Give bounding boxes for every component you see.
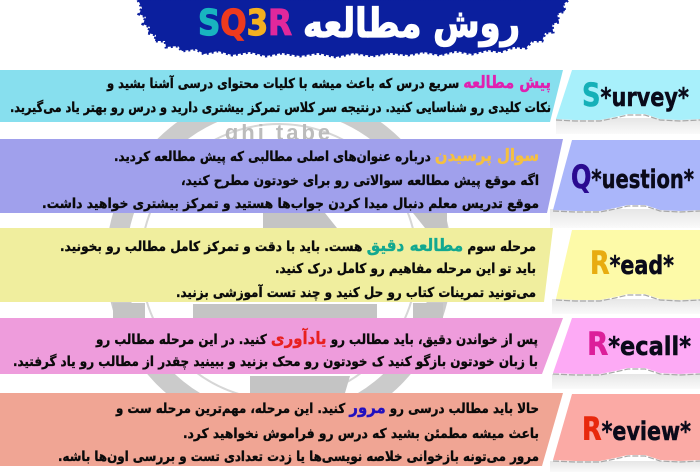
- text: review description: [58, 398, 539, 465]
- text: review description: باعث میشه مطمئن بشید که درس رو فراموش نخواهید کرد.: [183, 426, 539, 442]
- text: read description: [60, 236, 536, 301]
- title text: SQ3R: SQ3R: [198, 3, 292, 44]
- text: read description: مرحله سوم مطالعه دقیق هست. باید با دقت و تمرکز کامل مطالب رو بخونید.: [60, 236, 536, 256]
- panel: question: [0, 139, 700, 228]
- band: read: [0, 228, 553, 302]
- panel: review: [0, 393, 700, 472]
- text: recall description: با زبان خودتون بازگو کنید ک خودتون رو محک بزنید و ببینید چقدر از مطالب رو یاد گرفتید.: [13, 353, 538, 370]
- panel: read: [0, 228, 700, 314]
- text: recall description: پس از خواندن دقیق، باید مطالب رو یادآوری کنید. در این مرحله مطالب رو: [95, 327, 538, 349]
- card: review paper: [550, 394, 700, 472]
- watermark: circular stamp: ghi tabe: [225, 120, 333, 145]
- band: question: [0, 139, 563, 213]
- text: read description: می‌تونید تمرینات کتاب رو حل کنید و چند تست آموزشی بزنید.: [176, 284, 536, 301]
- card: read paper: R*ead*: [590, 244, 674, 282]
- text: question description: اگه موقع پیش مطالعه سوالاتی رو برای خودتون مطرح کنید،: [181, 172, 539, 189]
- text: survey description: نکات کلیدی رو شناسایی کنید. درنتیجه سر کلاس تمرکز بیشتری دارید و درس رو بهتر یاد می‌گیرید.: [10, 99, 551, 116]
- panel: survey: [0, 70, 700, 134]
- title banner: [138, 0, 568, 57]
- text: read description: باید تو این مرحله مفاهیم رو کامل درک کنید.: [275, 261, 536, 277]
- card: recall paper: [552, 318, 700, 389]
- banner: torn blue brush shape: [138, 0, 568, 57]
- text: review description: مرور می‌تونه بازخوانی خلاصه نویسی‌ها یا زدت تعدادی تست و بررسی اون‌ها باشه.: [58, 449, 539, 465]
- band: review: [0, 393, 563, 466]
- band: recall: [0, 318, 563, 374]
- band: survey: [0, 70, 563, 122]
- text: question description: سوال پرسیدن درباره عنوان‌های اصلی مطالبی که پیش مطالعه کردید.: [114, 146, 539, 166]
- card: question paper: [550, 140, 700, 228]
- text: survey description: [10, 73, 551, 116]
- panel: recall: [0, 318, 700, 389]
- card: read paper: [552, 230, 700, 314]
- text: recall description: [13, 327, 538, 370]
- watermark: circular stamp: [113, 99, 447, 425]
- text: survey description: پیش مطالعه سریع درس که باعث میشه با کلیات محتوای درسی آشنا بشید و: [106, 73, 551, 93]
- text: review description: حالا باید مطالب درسی رو مرور کنید. این مرحله، مهم‌ترین مرحله ست و: [115, 398, 539, 418]
- card: survey paper: [556, 70, 700, 134]
- text: question description: [42, 146, 539, 212]
- title text: Persian: روش مطالعه: [303, 1, 520, 47]
- text: question description: موقع تدریس معلم دنبال میدا کردن جواب‌ها هستید و تمرکز بیشتری خواهید داشت.: [42, 196, 539, 212]
